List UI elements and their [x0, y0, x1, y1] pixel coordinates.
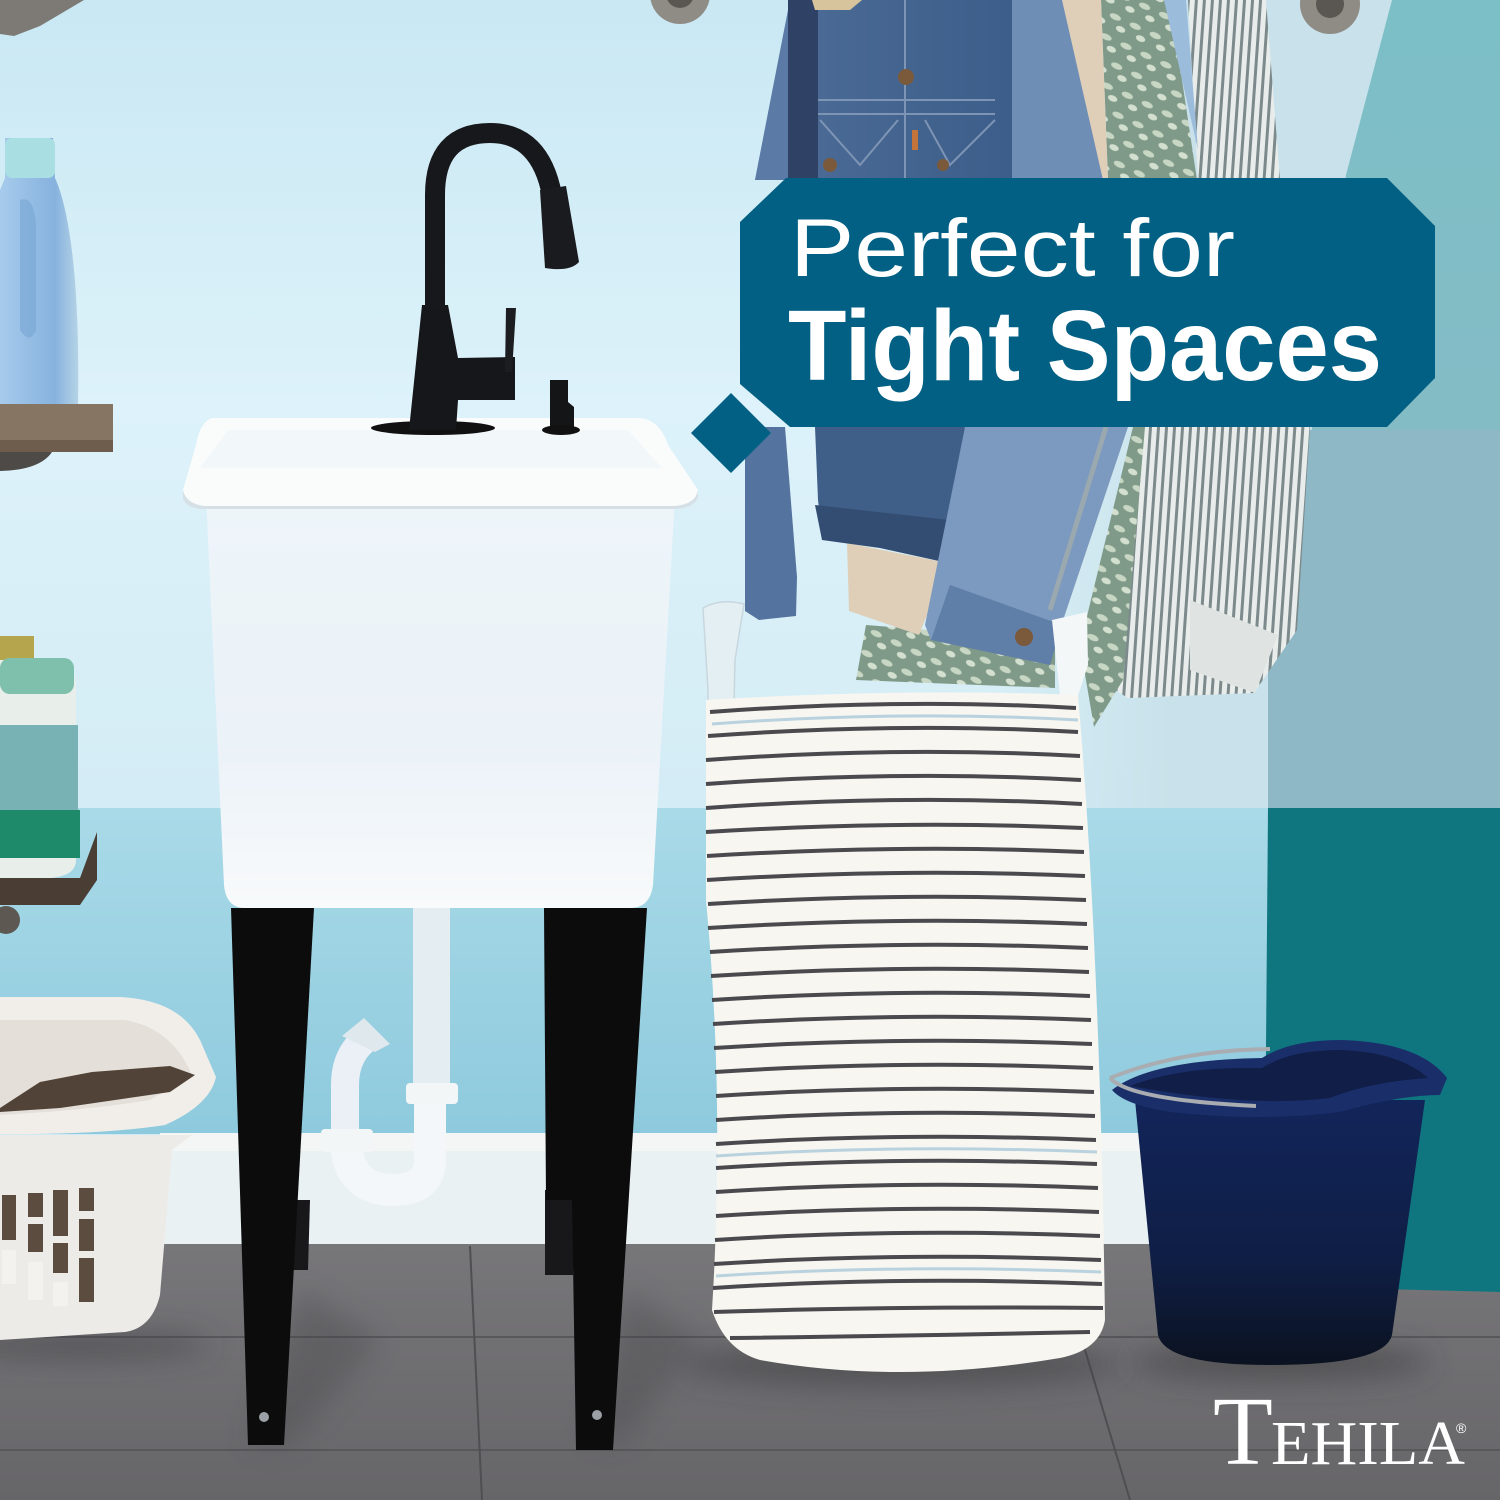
drain pipe: [321, 908, 458, 1190]
striped laundry hamper: [703, 602, 1105, 1372]
handle right: [1052, 612, 1088, 705]
jacket sleeve and hem: [745, 427, 797, 620]
shelf with detergent bottle: [0, 138, 113, 471]
hamper body: [706, 692, 1105, 1372]
striped shirt: [1115, 0, 1310, 698]
leg: right: [544, 908, 647, 1450]
teal towel at right: [1264, 0, 1500, 1292]
green floral shirt: [856, 0, 1197, 727]
blue shirt sliver: [1164, 0, 1198, 150]
callout bubble: [740, 178, 1435, 427]
callout diamond tail: [691, 393, 771, 473]
leg: left: [231, 908, 314, 1445]
black faucet: [371, 133, 580, 435]
rear leg feet: [292, 1190, 575, 1275]
brand logo: ®: [1456, 1420, 1467, 1436]
pipe wall flanges: [0, 0, 1360, 36]
sink: [183, 133, 698, 1450]
navy bucket: [1110, 1040, 1447, 1365]
brand logo: [1213, 1378, 1467, 1486]
denim jacket: [755, 0, 1103, 180]
laundry basket: [0, 997, 216, 1340]
tub rim: [183, 418, 698, 506]
handle left: [703, 602, 744, 745]
hanging clothes: [745, 0, 1310, 727]
hamper stripes: [706, 704, 1103, 1338]
shelf with wipes canister: [0, 636, 97, 934]
bucket handle: [1110, 1049, 1270, 1106]
callout: perfect for tight spaces: [691, 178, 1435, 473]
denim buttons: [823, 69, 1033, 646]
heading line 2: Tight Spaces: [788, 290, 1382, 402]
soap dispenser: [542, 380, 580, 435]
tub body: [206, 495, 675, 908]
brand logo: EHILA: [1271, 1410, 1465, 1478]
beige shirt: [847, 0, 1108, 635]
brand logo: T: [1213, 1378, 1273, 1486]
heading line 1: Perfect for: [790, 203, 1235, 294]
